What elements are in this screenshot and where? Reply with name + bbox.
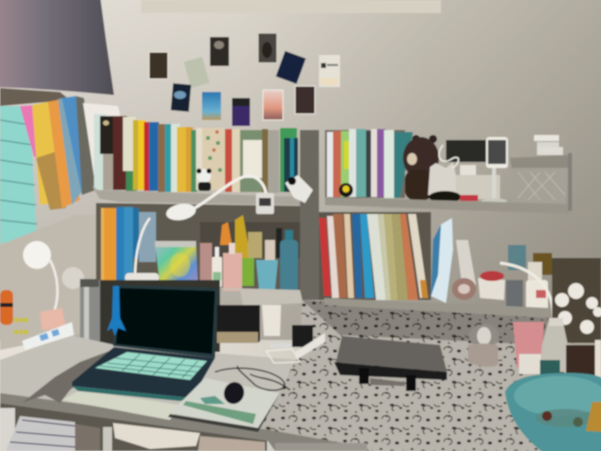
desk surface speckled and backsplash bbox=[258, 300, 601, 451]
holographic pouch bbox=[155, 241, 198, 287]
grey case on desk bbox=[334, 336, 447, 391]
silver basket bbox=[510, 155, 570, 205]
round wall fan bbox=[62, 267, 84, 289]
right lower shelf board bbox=[324, 298, 550, 318]
white medicine bottle bbox=[526, 262, 548, 311]
dark shelf backdrop bbox=[96, 203, 300, 290]
phone stand bbox=[481, 137, 508, 204]
spray bottle bbox=[212, 247, 222, 287]
desk front edge bbox=[0, 393, 370, 451]
photo wall bbox=[149, 33, 340, 126]
tilted blue magazine bbox=[431, 218, 453, 303]
cables bbox=[215, 366, 290, 390]
mid shelf books and blue binders bbox=[101, 207, 156, 283]
upper-left shelf board bbox=[92, 186, 300, 205]
laptop screen bbox=[113, 285, 218, 358]
laptop base bbox=[72, 347, 215, 398]
white box with red item bbox=[478, 271, 505, 300]
shelf clutter back bbox=[200, 215, 300, 286]
brown bear plush bbox=[403, 135, 439, 200]
laptop bbox=[72, 285, 218, 401]
laptop front lip bbox=[72, 386, 192, 401]
black and white figure on shelf bbox=[285, 175, 313, 203]
crystal globe bbox=[468, 324, 499, 367]
panda figure bbox=[196, 168, 212, 191]
red object bbox=[460, 195, 478, 201]
wall panel left bbox=[0, 215, 100, 350]
desk lamp upper bbox=[165, 176, 274, 222]
duck toy bbox=[339, 183, 353, 197]
desk surface left bbox=[0, 335, 300, 445]
power strip bbox=[22, 322, 74, 350]
curtain bbox=[0, 0, 114, 95]
batteries bbox=[14, 318, 28, 334]
mouse pad bbox=[168, 378, 279, 432]
white mug bbox=[262, 305, 281, 336]
clear bottle bbox=[540, 318, 570, 372]
teal basin bbox=[505, 373, 601, 451]
white cat figure bbox=[428, 162, 457, 195]
gold candy tin bbox=[533, 253, 552, 275]
blue phone clip bbox=[107, 286, 126, 336]
headband tape bbox=[452, 240, 476, 300]
box on desk bbox=[217, 305, 260, 343]
stainless thermos bbox=[80, 279, 100, 342]
pink tumbler bbox=[513, 322, 544, 368]
cotton flowers bbox=[552, 258, 601, 343]
USB charger and cables bbox=[266, 325, 325, 363]
small jars right bbox=[519, 340, 601, 395]
shadow strip under curtain bbox=[0, 88, 70, 106]
orange object at left bbox=[0, 290, 13, 325]
upper-left bookshelf row bbox=[83, 103, 298, 193]
shelf support bbox=[568, 153, 572, 211]
teal cup bbox=[256, 260, 278, 290]
shelf upright center bbox=[300, 130, 319, 300]
black mouse bbox=[221, 379, 247, 407]
left desk lamp bbox=[23, 241, 66, 330]
lower center shelf with paper bbox=[125, 285, 303, 306]
desk mat left bbox=[22, 350, 112, 403]
white mat under laptop bbox=[62, 390, 180, 420]
towels on rail bbox=[0, 96, 96, 243]
right top shelf board bbox=[325, 197, 570, 214]
right lower books bbox=[319, 212, 431, 300]
grey-right books bbox=[325, 129, 413, 198]
stand box bbox=[439, 140, 500, 199]
mid lamp bbox=[125, 218, 159, 283]
keyboard bbox=[95, 352, 207, 380]
dark gap behind laptop bbox=[92, 280, 220, 352]
dark clear jar bbox=[506, 280, 523, 307]
blue bottle back bbox=[508, 245, 526, 270]
black cloth on shelf bbox=[429, 191, 461, 203]
white boxes on basket bbox=[534, 135, 563, 155]
under-desk area bbox=[0, 403, 275, 451]
lower right lamp bbox=[500, 263, 553, 320]
blue water bottle bbox=[280, 230, 298, 292]
pink lotion bottle bbox=[223, 243, 242, 291]
